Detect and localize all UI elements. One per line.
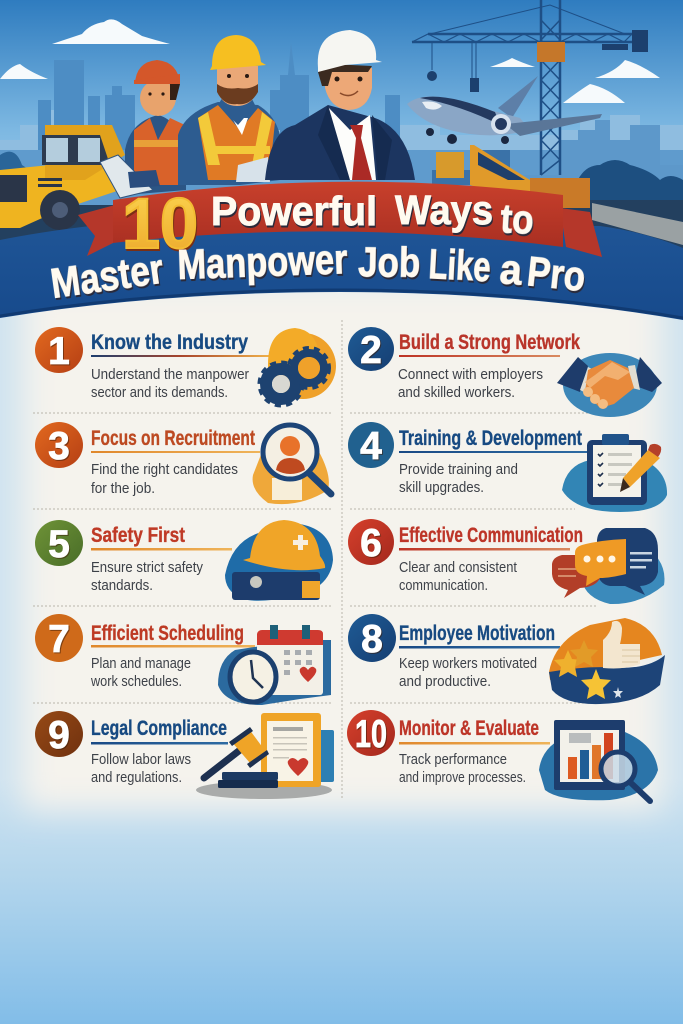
description: Track performance [399, 751, 507, 768]
item 6 [348, 519, 664, 604]
description [91, 461, 238, 497]
item 1 [35, 327, 336, 405]
heading: Focus on Recruitment [91, 427, 255, 450]
description: Plan and manage [91, 655, 191, 672]
clouds [0, 19, 660, 103]
description: Understand the manpower [91, 366, 249, 383]
number 8 badge: 8 [361, 618, 383, 661]
number 1 badge [35, 327, 83, 373]
item 9 [35, 711, 334, 799]
title line one [211, 187, 535, 243]
number 7 badge [35, 614, 83, 662]
description [399, 655, 537, 690]
heading: Build a Strong Network [399, 331, 580, 354]
number 7 badge: 7 [48, 618, 70, 661]
description: Ensure strict safety [91, 559, 203, 576]
description: sector and its demands. [91, 384, 228, 401]
description: work schedules. [90, 673, 182, 690]
heading: Effective Communication [399, 524, 583, 547]
number 6 badge [348, 519, 394, 565]
heading: Legal Compliance [91, 717, 227, 740]
title line two [48, 235, 588, 307]
heading: Training & Development [399, 427, 582, 450]
number 2 badge [348, 327, 394, 372]
worker left [100, 60, 186, 198]
description: Keep workers motivated [399, 655, 537, 672]
title line two: Like [428, 240, 492, 290]
description [399, 461, 518, 496]
description: Connect with employers [398, 366, 543, 383]
description: and regulations. [91, 769, 182, 786]
heading: Know the Industry [91, 331, 248, 354]
light band edge [0, 290, 683, 318]
description: communication. [399, 577, 488, 594]
number 6 badge: 6 [360, 522, 382, 565]
description: and improve processes. [399, 769, 526, 786]
ground [0, 200, 683, 250]
worker middle [178, 35, 280, 185]
number 5 badge: 5 [48, 523, 70, 566]
number 4 badge: 4 [360, 425, 382, 468]
airplane [407, 76, 602, 144]
item 10 [347, 710, 658, 801]
description [91, 366, 249, 401]
item 2 [348, 327, 662, 417]
number 4 badge [348, 422, 394, 468]
city skyline [0, 42, 683, 250]
heading: Employee Motivation [399, 622, 555, 645]
description: Clear and consistent [399, 559, 518, 576]
number 2 badge: 2 [360, 329, 382, 372]
manager in suit [265, 30, 415, 180]
crane [412, 0, 648, 175]
number 1 badge: 1 [48, 330, 70, 373]
number 9 badge: 9 [48, 714, 70, 757]
icon: helmet and gears [260, 328, 336, 405]
title line two: Job [358, 238, 421, 286]
title line one: Ways [395, 187, 493, 233]
number 8 badge [348, 614, 396, 662]
ribbon [78, 182, 602, 264]
icon: safety helmet [225, 520, 333, 601]
description: Follow labor laws [91, 751, 191, 768]
title numeral: 10 [122, 185, 198, 264]
icon: chart and magnifier [539, 720, 658, 801]
description [399, 751, 526, 786]
title line two: Manpower [177, 235, 348, 288]
number 3 badge [35, 422, 83, 468]
title line two: a [498, 245, 524, 294]
description: and skilled workers. [398, 384, 515, 401]
description [399, 559, 518, 594]
icon: calendar and clock [218, 625, 331, 705]
title line two: Pro [525, 247, 588, 300]
item 7 [35, 614, 331, 705]
item 4 [348, 422, 667, 512]
dump truck [432, 145, 590, 208]
header illustration [0, 0, 683, 320]
heading: Monitor & Evaluate [399, 717, 539, 740]
icon: thumbs up and stars [549, 618, 665, 704]
number 9 badge [35, 711, 83, 757]
number 5 badge [35, 520, 83, 566]
description: Find the right candidates [91, 461, 238, 478]
title line one: Powerful [211, 188, 377, 234]
title line one: to [500, 195, 535, 243]
description: and productive. [399, 673, 491, 690]
sky [0, 0, 683, 260]
icon: magnifier on candidate [253, 425, 331, 504]
blue header band [0, 226, 683, 320]
title line two: Master [48, 245, 166, 307]
item 5 [35, 520, 333, 601]
description [91, 751, 191, 786]
icon: clipboard and pencil [562, 434, 667, 512]
item 8 [348, 614, 665, 704]
description [90, 655, 191, 690]
icon: handshake [557, 353, 662, 417]
description: skill upgrades. [399, 479, 484, 496]
number 3 badge: 3 [48, 425, 70, 468]
road [592, 203, 683, 245]
description: for the job. [91, 480, 155, 497]
item 3 [35, 422, 331, 504]
heading: Efficient Scheduling [91, 622, 244, 645]
number 10 badge: 10 [355, 713, 387, 756]
heading: Safety First [91, 524, 185, 547]
bulldozer [0, 125, 125, 230]
icon: speech bubbles [552, 528, 664, 604]
description: standards. [91, 577, 153, 594]
description: Provide training and [399, 461, 518, 478]
description [91, 559, 203, 594]
icon: gavel and document [196, 713, 334, 799]
description [398, 366, 543, 401]
